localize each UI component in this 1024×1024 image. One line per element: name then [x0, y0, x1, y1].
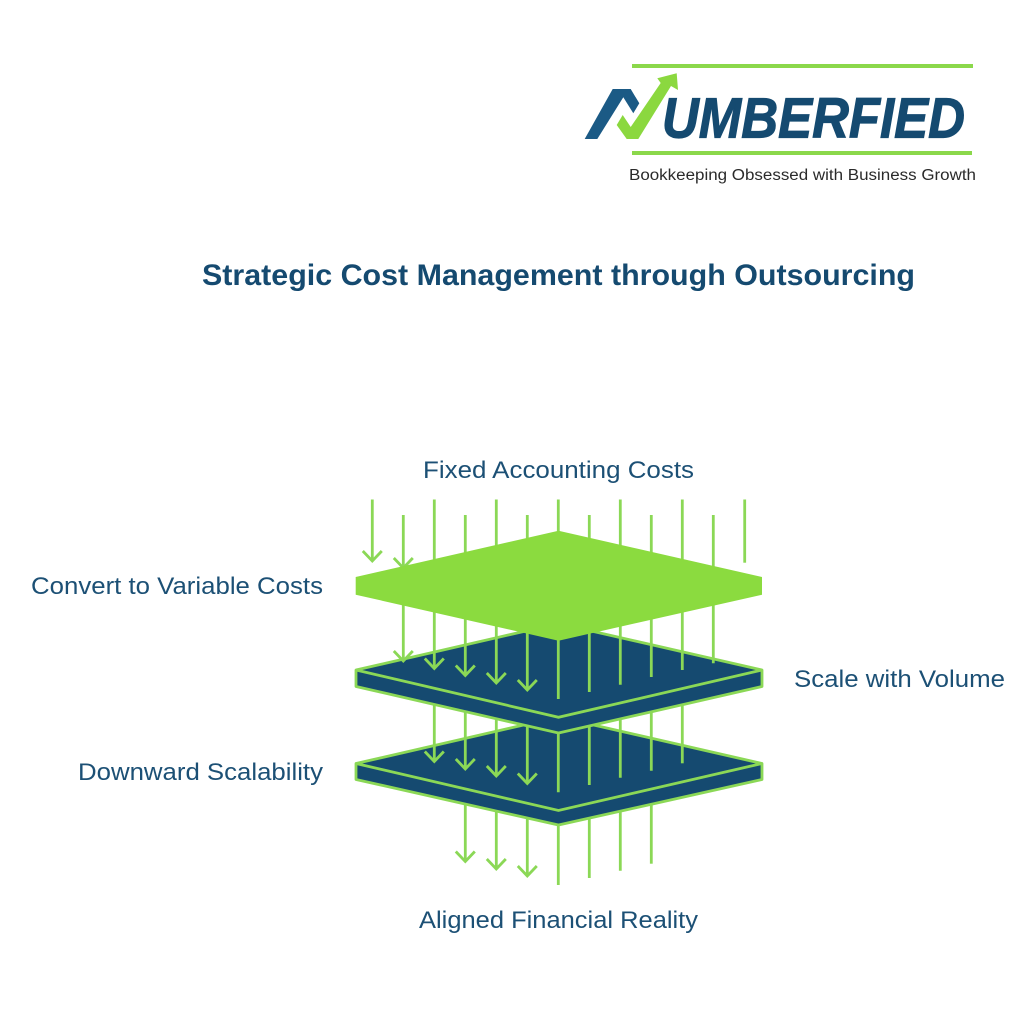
logo mark: green arrow [617, 73, 678, 139]
slab: convert to variable costs [356, 531, 762, 641]
label: aligned financial reality: Aligned Financial Reality [419, 907, 699, 934]
logo wordmark: UMBERFIED [662, 88, 965, 150]
label: downward scalability: Downward Scalability [78, 759, 324, 786]
slab: downward scalability [356, 717, 762, 825]
logo tagline: Bookkeeping Obsessed with Business Growth [629, 167, 976, 184]
title: Strategic Cost Management through Outsourcing [202, 259, 915, 292]
arrows between middle and bottom slabs [425, 700, 682, 792]
label: scale with volume: Scale with Volume [794, 666, 1005, 693]
layered slab diagram with arrows [356, 500, 762, 885]
label: fixed accounting costs: Fixed Accounting Costs [423, 457, 694, 484]
logo mark: blue N [585, 89, 639, 139]
slab: scale with volume [356, 624, 762, 733]
arrows below bottom slab [456, 800, 651, 885]
label: convert to variable costs: Convert to Variable Costs [31, 573, 323, 600]
logo: Numberfied [585, 64, 976, 184]
arrows between top and middle slabs [363, 500, 745, 699]
